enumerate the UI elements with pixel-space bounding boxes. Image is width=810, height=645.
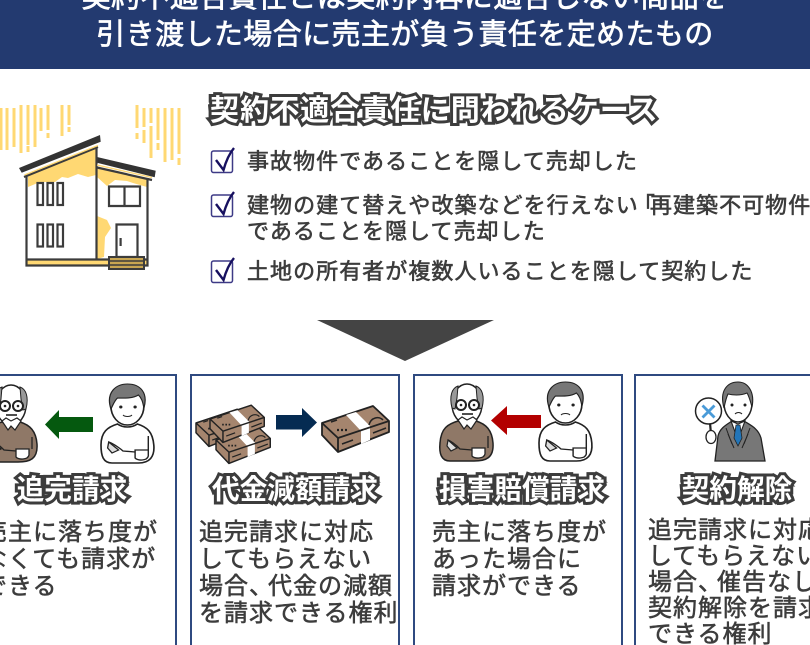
header text <box>82 0 728 51</box>
card text: 代金減額請求: 場合、代金の減額 <box>199 573 393 600</box>
header text: 引き渡した場合に売主が負う責任を定めたもの <box>96 19 714 51</box>
arrow: down <box>317 320 494 361</box>
card text: 損害賠償請求: 売主に落ち度が <box>432 519 607 546</box>
icon: stacks of money <box>195 404 271 464</box>
icon: house with yellow stains <box>0 105 180 270</box>
icon: young man 1 <box>100 384 155 464</box>
icon: man in suit with X sign <box>694 382 766 462</box>
card title: 追完請求: 追完請求 <box>17 474 127 505</box>
case 2 text: であることを隠して売却した <box>247 219 546 244</box>
card text: 代金減額請求 <box>199 519 399 627</box>
icon: old man 1 <box>0 384 38 463</box>
icon: check 1 <box>210 147 235 174</box>
case list checkboxes <box>210 147 235 284</box>
icon: red arrow <box>491 406 541 435</box>
card text: 代金減額請求: 追完請求に対応 <box>199 519 374 546</box>
card text: 契約解除 <box>648 517 810 645</box>
icon: check 2 <box>210 191 235 218</box>
card title: 損害賠償請求: 損害賠償請求 <box>439 474 605 505</box>
card title: 代金減額請求: 代金減額請求 <box>212 474 378 505</box>
section heading: 契約不適合責任に問われるケース <box>210 95 659 127</box>
case 2 text <box>247 193 810 244</box>
panel: 損害賠償請求 <box>413 374 623 645</box>
card text: 損害賠償請求: 請求ができる <box>432 573 582 600</box>
icon: check 3 <box>210 257 235 284</box>
icon: single money stack <box>321 405 390 453</box>
panel: 追完請求 <box>0 374 177 645</box>
card text: 追完請求 <box>0 519 158 600</box>
case 1 text: 事故物件であることを隠して売却した <box>247 149 638 174</box>
icon: old man 2 <box>439 383 494 462</box>
icon: green arrow <box>45 410 93 439</box>
card text: 損害賠償請求 <box>432 519 607 600</box>
card text: 損害賠償請求: あった場合に <box>432 546 582 573</box>
card text: 代金減額請求: を請求できる権利 <box>199 600 399 627</box>
case 3 text: 土地の所有者が複数人いることを隠して契約した <box>247 259 753 284</box>
card title: 契約解除: 契約解除 <box>682 474 792 505</box>
header banner <box>0 0 810 69</box>
icon: young man 2 <box>538 382 593 462</box>
icon: navy arrow <box>276 408 317 437</box>
panel: 代金減額請求 <box>190 374 400 645</box>
panel: 契約解除 <box>634 374 810 645</box>
card text: 代金減額請求: してもらえない <box>199 546 372 573</box>
